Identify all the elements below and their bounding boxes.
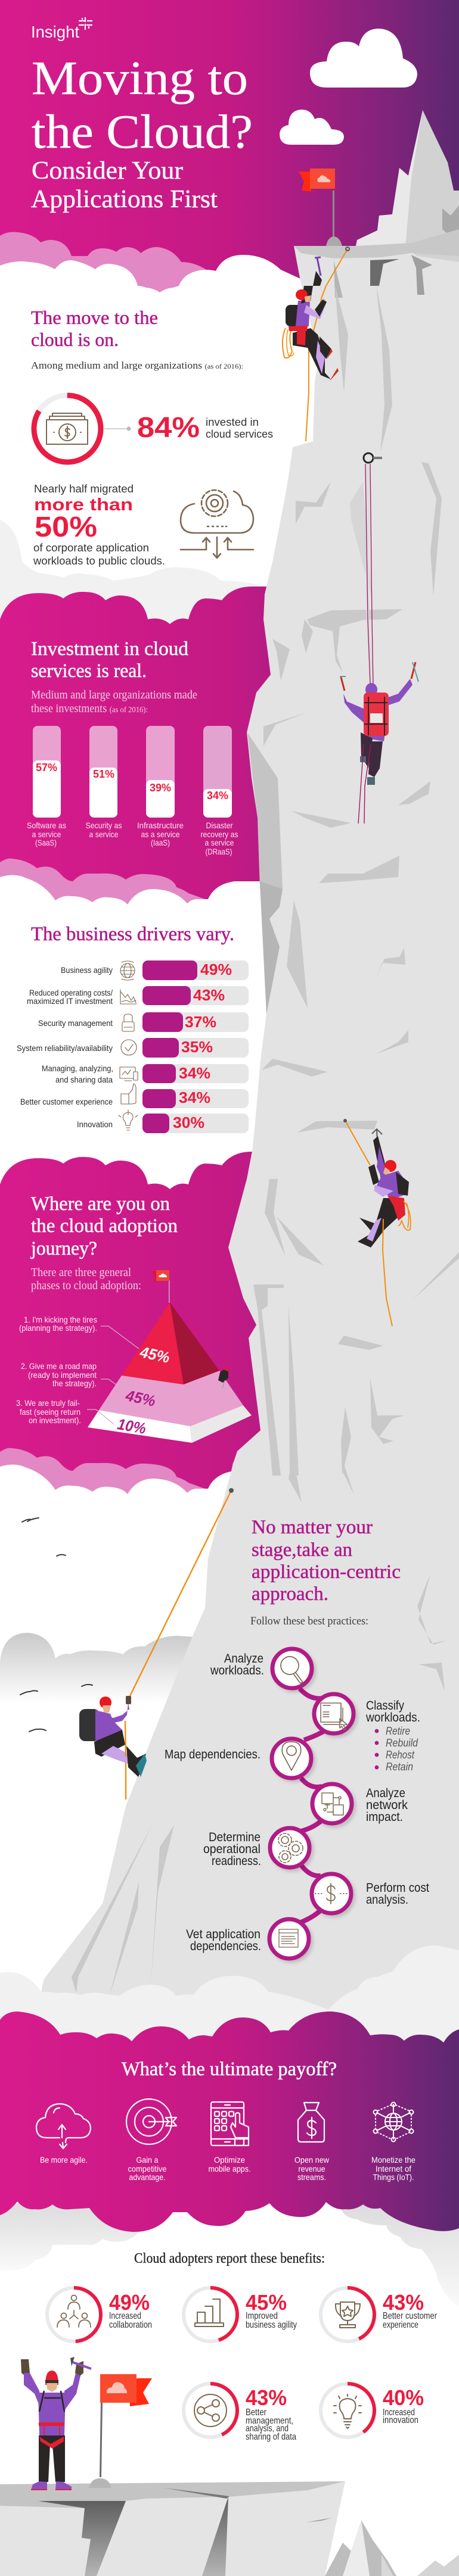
hero background [0,0,459,298]
step: analyze network impact: impact. [366,1810,403,1824]
title: Applications First [31,186,218,213]
row: data: 34% [179,1064,210,1082]
step: perform cost analysis: Perform cost [366,1881,429,1895]
workload options: Retire [386,1725,410,1737]
section heading: adoption journey: the cloud adoption [31,1215,178,1237]
mini climber [218,1367,228,1389]
benefit: collaboration: Increased [109,2311,141,2321]
climber four [79,1696,147,1777]
step: analyze network impact: Analyze [366,1786,405,1800]
benefits [47,2288,438,2442]
phase labels: on investment). [29,1415,81,1425]
logo [31,17,92,41]
victory climber [21,2357,91,2490]
benefit: business agility: business agility [246,2320,297,2330]
benefit: collaboration: collaboration [109,2320,152,2330]
bar: IaaS: as a service [141,829,180,839]
phase labels: 2. Give me a road map [21,1361,97,1371]
stat text: more than 50 percent: more than [34,495,133,514]
section heading: application-centric: stage,take an [252,1539,352,1561]
base tier [88,1410,192,1443]
icon: light bulb [119,1110,138,1130]
middle tier [99,1371,243,1426]
workload options: Retain [386,1761,413,1773]
bar: DRaaS: recovery as [200,829,238,839]
row: customer experience [20,1084,249,1108]
hanging rope [126,1488,234,1800]
icon: falling chart [120,990,137,1004]
bar: DRaaS: (DRaaS) [205,847,232,856]
benefit: business agility [184,2288,297,2341]
row: innovation [77,1110,249,1133]
section heading: investment: services is real. [31,660,147,682]
section heading: the move to the cloud: The move to the [31,307,158,328]
row: customer experience: Better customer experience [20,1097,113,1106]
section heading: adoption journey [30,1193,178,1259]
step: classify workloads: workloads. [365,1711,420,1724]
item: revenue: Open new [294,2155,330,2165]
stat text: 84 percent: 84% [137,412,200,444]
climber two [340,662,418,824]
row: reliability: System reliability/availability [17,1043,113,1053]
phase labels: the strategy). [52,1379,97,1388]
bar: DRaaS: 34% [207,790,228,802]
step: determine operational readiness: readiness. [212,1854,261,1868]
row: reliability: 35% [181,1038,213,1056]
icon: globe [120,961,135,980]
stat text: more than 50 percent: Nearly half migrated [34,483,134,495]
icon: money [46,413,88,444]
benefit: customer experience: experience [383,2320,418,2330]
step: perform cost analysis: analysis. [366,1893,408,1907]
item: competitive advantage [126,2099,176,2182]
rope anchor and pink rope [364,453,382,685]
step: determine operational readiness: operational [203,1842,260,1856]
top tier [122,1302,184,1384]
item: mobile apps [209,2102,250,2173]
payoff section background [0,2011,459,2232]
benefit: data management: 43% [246,2385,287,2410]
benefit: innovation: 40% [383,2385,424,2410]
connector line [104,426,131,431]
item: internet of things [371,2102,415,2182]
mountain summit shading [294,110,459,298]
item: mobile apps: mobile apps. [209,2164,250,2173]
row: data [42,1064,249,1084]
step: map dependencies: Map dependencies. [165,1748,260,1761]
row: data: and sharing data [55,1075,113,1084]
section heading: the move to the cloud [31,307,158,350]
benefit: data management [184,2384,296,2442]
bar: DRaaS: Disaster [206,821,233,830]
stat text: more than 50 percent: 50% [35,512,97,543]
row: innovation: 30% [173,1114,204,1131]
step: analyze network impact [312,1784,408,1824]
rock face [42,110,459,2037]
pyramid chart: 10% [116,1415,147,1437]
text: investment intro: Medium and large organizations made [31,688,197,701]
step: classify workloads: Classify [366,1699,404,1713]
phase labels [16,1315,97,1425]
benefit: collaboration [47,2288,152,2341]
chain connectors [300,1689,323,1922]
adoption section cloud band [0,1448,280,1524]
bar: security: a service [89,829,119,839]
text: follow best practices: Follow these best practices: [250,1615,368,1627]
row: reduced costs [27,986,249,1006]
step: vet application dependencies: dependencies. [190,1939,261,1953]
row: data: Managing, analyzing, [42,1064,113,1073]
hero cloud band [0,232,316,316]
item: internet of things: Internet of [376,2164,411,2173]
pyramid flag [152,1270,170,1303]
summit cliff [0,2481,345,2576]
benefit: business agility: 45% [246,2290,287,2315]
bar: SaaS [27,726,66,847]
title: Moving to [32,52,248,105]
rock cracks [72,286,459,1995]
gray cloud above investment section [0,520,265,631]
step: analyze workloads: workloads. [210,1664,264,1677]
section heading: investment [31,638,188,682]
gray clouds above payoff [0,1945,459,2048]
item: competitive advantage: Gain a [136,2155,159,2165]
step: classify workloads [314,1694,420,1773]
row: reduced costs: maximized IT investment [27,996,113,1006]
phase labels: (planning the strategy). [19,1323,97,1333]
climber three [343,1119,411,1326]
bar: SaaS: Software as [27,821,66,830]
section heading: investment: Investment in cloud [31,638,188,660]
workload options: Rebuild [386,1737,418,1749]
stat text: 84 percent: invested in [206,416,259,428]
row: reduced costs: Reduced operating costs/ [29,988,113,997]
benefit: customer experience [321,2288,438,2341]
text: adoption intro [31,1266,141,1292]
benefit: data management: sharing of data [246,2432,296,2442]
row: business agility [61,960,249,980]
icon: thumbs up [121,1084,136,1104]
bar: SaaS: a service [32,829,61,839]
text: adoption intro: There are three general [31,1266,131,1279]
climber one [283,247,349,441]
bar: IaaS: 39% [150,782,171,794]
distant mountains [325,2520,459,2576]
investment section cloud band [0,859,280,935]
item: internet of things: Things (IoT). [373,2172,414,2182]
benefit: data management: Better [246,2407,267,2418]
step: determine operational readiness [203,1828,309,1868]
row: business agility: 49% [200,960,232,978]
stat text: more than 50 percent [33,483,165,567]
section heading: adoption journey: Where are you on [31,1193,170,1215]
row: business agility: Business agility [61,965,113,975]
text: investment intro [31,688,197,715]
item: competitive advantage: competitive [128,2164,167,2173]
section heading: application-centric [252,1517,401,1605]
item: mobile apps: Optimize [214,2155,245,2165]
section heading: the move to the cloud: cloud is on. [31,329,119,350]
workload options [375,1725,418,1773]
step: analyze workloads [210,1649,312,1688]
tier values: 45% [138,1343,172,1367]
stat text: 84 percent: cloud services [206,428,273,440]
section heading: payoff: What’s the ultimate payoff? [122,2059,337,2080]
pyramid chart: 45% [123,1386,157,1410]
benefit: innovation [321,2384,424,2437]
stat: 84 percent donut [34,395,101,462]
step: perform cost analysis [312,1874,429,1913]
row: security [38,1012,249,1032]
bar: security: Security as [86,821,122,830]
text: among medium and large organizations: Among medium and large organizations (as of 2016): [31,360,243,371]
step: vet application dependencies: Vet application [186,1928,260,1941]
title: the Cloud? [32,106,253,158]
benefit: business agility: Improved [246,2311,278,2321]
section heading: adoption journey: journey? [30,1238,97,1259]
row: security: 37% [185,1013,216,1031]
item: internet of things: Monetize the [371,2155,415,2165]
stat text: 84 percent [137,412,273,444]
section heading: business drivers: The business drivers vary. [31,924,234,945]
icon: padlock [122,1014,134,1031]
bar: SaaS: 57% [36,762,57,774]
step: map dependencies [165,1739,311,1778]
step: analyze workloads: Analyze [224,1652,263,1666]
stat text: more than 50 percent: of corporate application [33,542,149,554]
benefit: customer experience: 43% [383,2290,424,2315]
pyramid chart [16,1270,252,1443]
text: cloud adopters report: Cloud adopters report these benefits: [134,2251,325,2266]
fading gray clouds behind climber [0,1633,203,1703]
bar: security [86,726,122,839]
row: reduced costs: 43% [193,986,225,1004]
row: reliability [17,1038,249,1058]
title [31,52,253,213]
icon: monitor [120,1067,138,1081]
bar: DRaaS: a service [205,838,234,847]
bar: security: 51% [93,768,114,780]
workload options: Rehost [386,1749,415,1761]
item: revenue: streams. [297,2172,326,2182]
row: customer experience: 34% [179,1089,210,1106]
section heading: application-centric: approach. [252,1583,328,1605]
benefit: collaboration: 49% [109,2290,150,2315]
step: vet application dependencies [186,1919,309,1958]
bar: IaaS: Infrastructure [137,821,184,830]
soft shadow clouds below payoff [0,2203,459,2306]
bar chart: business drivers [17,960,249,1133]
item: agile: Be more agile. [40,2155,88,2165]
leader lines [87,1326,139,1424]
phase labels: fast (seeing return [20,1407,80,1417]
benefit: data management: management, [246,2416,293,2426]
section heading: application-centric: No matter your [252,1517,373,1538]
bar: IaaS: (IaaS) [151,838,170,847]
bar chart: investments [27,726,238,856]
benefit: innovation: innovation [383,2415,418,2425]
icon: small cloud [280,110,344,145]
item: revenue [294,2103,330,2182]
step: determine operational readiness: Determine [209,1830,260,1844]
benefit: data management: analysis, and [246,2424,289,2434]
bar: IaaS [137,726,184,847]
birds [20,1518,92,1732]
text: investment intro: these investments (as of 2016): [31,702,148,715]
section heading: application-centric: application-centric [252,1561,401,1583]
icon: check [121,1040,137,1055]
investment section background [0,587,280,911]
row: innovation: Innovation [77,1119,113,1129]
step: analyze network impact: network [366,1798,408,1812]
logo: Insight [31,23,79,41]
item: competitive advantage: advantage. [129,2172,166,2182]
benefit: customer experience: Better customer [383,2311,438,2321]
payoff items [36,2099,415,2182]
bar: SaaS: (SaaS) [35,838,57,847]
adoption section background [0,1152,280,1507]
icon: large cloud [310,29,417,88]
row: security: Security management [38,1018,113,1028]
phase labels: (ready to implement [28,1370,97,1380]
title: Consider Your [32,157,183,185]
phase labels: 3. We are truly fail- [16,1398,80,1408]
phase labels: 1. I'm kicking the tires [24,1315,97,1324]
icon: gear cloud [181,490,253,558]
bar: DRaaS [200,726,238,856]
summit flag [299,169,342,246]
stat text: more than 50 percent: workloads to public clouds. [33,555,165,567]
victory flag [89,2374,152,2488]
item: agile [36,2104,91,2165]
best-practices chain [165,1649,429,1958]
text: adoption intro: phases to cloud adoption: [31,1279,141,1292]
item: revenue: revenue [298,2164,325,2173]
benefit: innovation: Increased [383,2407,415,2418]
